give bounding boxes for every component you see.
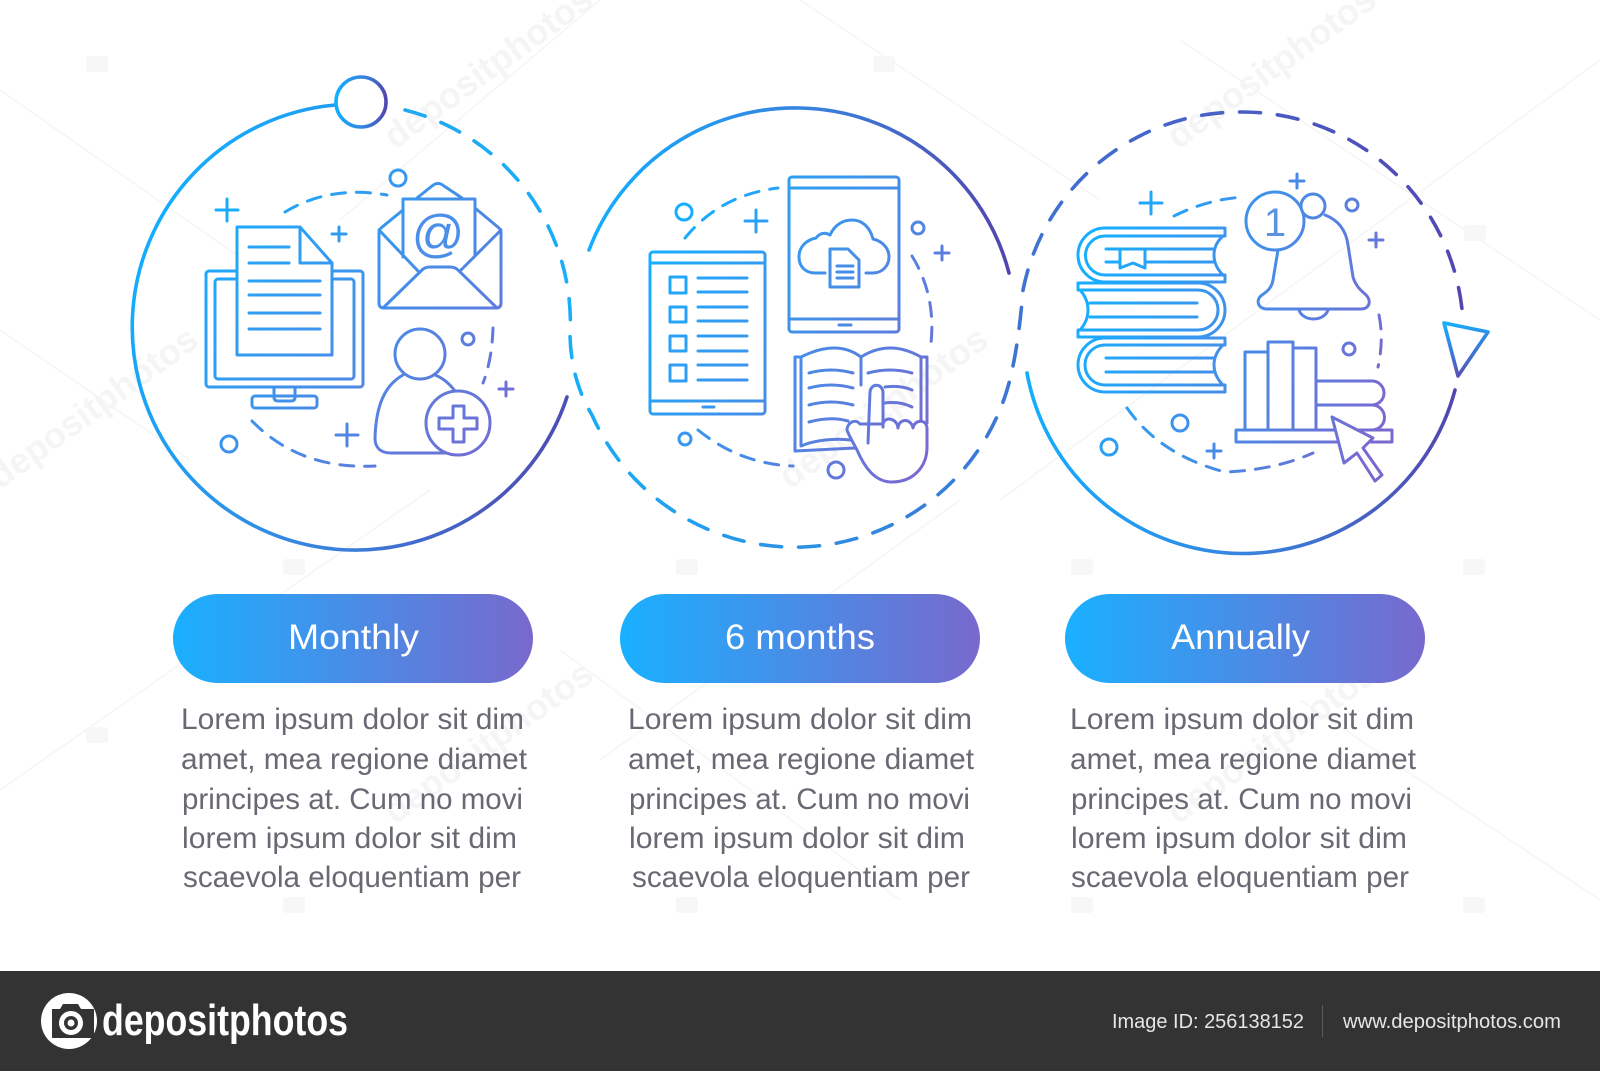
pill heading: Monthly: Monthly xyxy=(288,618,420,657)
icon: mouse cursor xyxy=(1332,417,1382,481)
text block: monthly description xyxy=(181,703,528,894)
circle 3 solid arc xyxy=(1027,373,1455,554)
icon: cloud tablet xyxy=(789,177,899,332)
inner dashed orbit xyxy=(685,188,932,466)
circle 2 solid arc xyxy=(589,108,1009,273)
icon: stack of books xyxy=(1078,228,1225,392)
pill heading: Annually xyxy=(1065,594,1425,683)
start node circle xyxy=(336,77,386,127)
footer image id: Image ID: 256138152 xyxy=(1112,1011,1304,1033)
text block: annually description: amet, mea regione diamet xyxy=(1070,743,1417,776)
text block: 6 months description: lorem ipsum dolor sit dim xyxy=(629,822,965,855)
icon: checklist tablet xyxy=(650,252,765,414)
footer bar xyxy=(0,971,1600,1071)
icon: user with plus badge xyxy=(375,329,490,455)
icon: open envelope with at sign: @ xyxy=(412,205,464,263)
watermark layer: depositphotos xyxy=(376,653,600,831)
text block: monthly description: scaevola eloquentiam per xyxy=(183,861,521,894)
decorative small circles xyxy=(221,170,474,452)
icon group: monthly xyxy=(206,170,513,466)
icon group: 6 months xyxy=(650,177,949,482)
text block: monthly description: principes at. Cum no movi xyxy=(182,783,523,816)
text block: 6 months description: principes at. Cum no movi xyxy=(629,783,970,816)
text block: annually description: scaevola eloquentiam per xyxy=(1071,861,1409,894)
icon: notification bell xyxy=(1246,192,1369,319)
text block: annually description: principes at. Cum no movi xyxy=(1071,783,1412,816)
icon group: annually xyxy=(1078,174,1392,481)
pill heading: 6 months xyxy=(620,594,980,683)
text block: 6 months description: scaevola eloquentiam per xyxy=(632,861,970,894)
icon: open book with pointing hand xyxy=(795,348,927,482)
icon: open envelope with at sign xyxy=(379,184,501,308)
icon: computer monitor xyxy=(206,271,363,408)
pill heading: Monthly xyxy=(173,594,533,683)
text block: 6 months description: Lorem ipsum dolor sit dim xyxy=(628,703,972,736)
pill heading: 6 months: 6 months xyxy=(725,618,875,657)
footer logo mark xyxy=(41,993,97,1049)
footer logo wordmark: depositphotos xyxy=(102,996,348,1045)
icon: document xyxy=(237,227,332,355)
decorative small circles xyxy=(676,204,924,478)
icon: bookshelf xyxy=(1236,342,1392,442)
watermark layer: depositphotos xyxy=(1159,653,1383,831)
text block: monthly description: amet, mea regione diamet xyxy=(181,743,528,776)
decorative small circles xyxy=(1101,199,1358,455)
footer website: www.depositphotos.com xyxy=(1342,1011,1561,1033)
text block: monthly description: Lorem ipsum dolor sit dim xyxy=(181,703,524,736)
decorative plus marks xyxy=(745,210,949,260)
top book xyxy=(1078,228,1225,282)
flow ring: dashed connector through all three circles xyxy=(405,110,1463,547)
bottom book xyxy=(1078,338,1225,392)
text block: monthly description: lorem ipsum dolor sit dim xyxy=(182,822,517,855)
middle book xyxy=(1078,283,1225,337)
text block: 6 months description xyxy=(628,703,975,894)
icon: notification bell: 1 xyxy=(1264,201,1286,245)
watermark layer: depositphotos xyxy=(771,318,995,496)
end arrow triangle xyxy=(1444,323,1488,376)
text block: 6 months description: amet, mea regione diamet xyxy=(628,743,975,776)
text block: annually description xyxy=(1070,703,1417,894)
circle 1 solid arc xyxy=(132,105,567,550)
decorative plus marks xyxy=(216,199,513,446)
text block: annually description: lorem ipsum dolor sit dim xyxy=(1071,822,1407,855)
inner dashed orbit xyxy=(252,192,493,466)
pill heading: Annually: Annually xyxy=(1171,618,1311,657)
inner dashed orbit xyxy=(1127,197,1381,472)
text block: annually description: Lorem ipsum dolor sit dim xyxy=(1070,703,1414,736)
decorative plus marks xyxy=(1140,174,1383,458)
